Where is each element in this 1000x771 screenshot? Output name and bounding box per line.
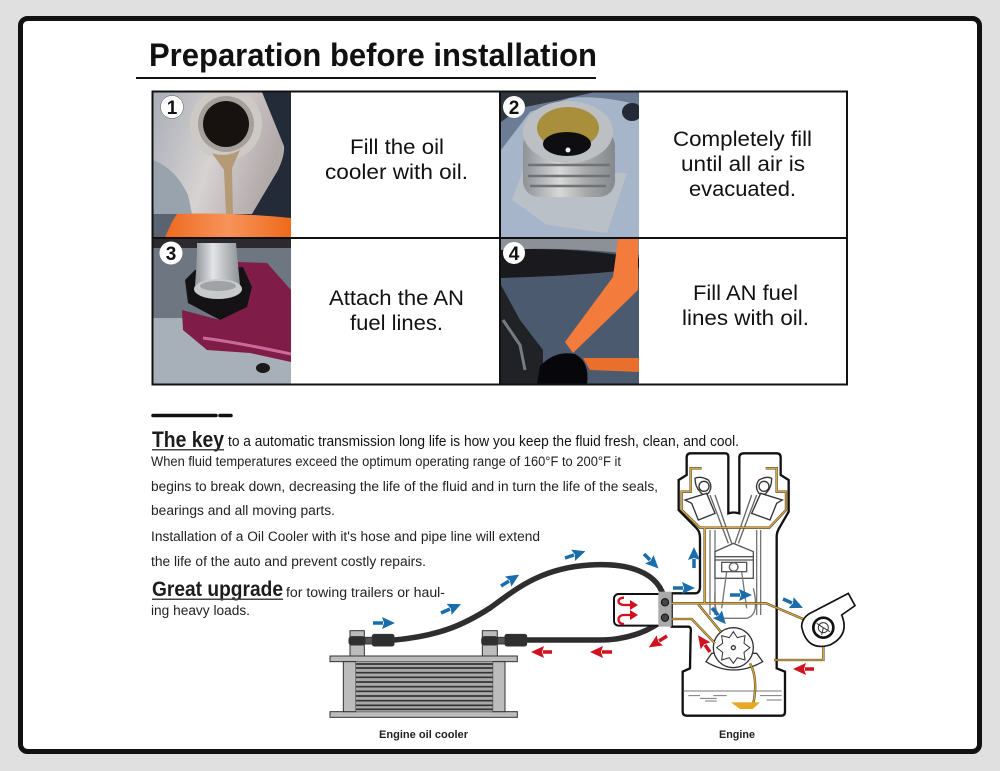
- diagram: oil cooler: [330, 631, 527, 717]
- turbo: [802, 593, 855, 646]
- panel: step 2 photo: [501, 92, 642, 237]
- panel: step 4 photo: [501, 239, 639, 384]
- number badge 4: [503, 242, 525, 265]
- number badge 1: [160, 96, 184, 119]
- heading: the key: [152, 427, 739, 452]
- number badge 1: 1: [167, 98, 178, 119]
- step 1 text: Fill the oil: [350, 136, 444, 159]
- piston and internals: [683, 530, 782, 701]
- flow arrows: red: [543, 636, 814, 669]
- body text: the life of the auto and prevent costly repairs.: [151, 554, 426, 569]
- heading: the key: The key: [152, 427, 225, 452]
- diagram: hoses: [394, 565, 665, 640]
- step 4 text: [682, 282, 809, 330]
- diagram: engine: [614, 453, 855, 716]
- step 4 text: lines with oil.: [682, 307, 809, 330]
- step 4 text: Fill AN fuel: [693, 282, 798, 305]
- panel: step 3 photo: [153, 239, 291, 384]
- step 2 text: evacuated.: [689, 178, 796, 201]
- heading: great upgrade: ing heavy loads.: [151, 603, 250, 618]
- label: engine oil cooler: Engine oil cooler: [379, 729, 469, 741]
- step 2 text: until all air is: [681, 153, 805, 176]
- number badge 3: 3: [166, 244, 176, 265]
- step 1 text: [325, 136, 468, 184]
- panel: steps table grid: [152, 91, 847, 385]
- step 3 text: [329, 287, 464, 335]
- step 2 text: Completely fill: [673, 128, 812, 151]
- title: Preparation before installation: [149, 37, 597, 73]
- step 2 text: [673, 128, 812, 201]
- label: engine: Engine: [719, 729, 755, 741]
- oil passages: [672, 468, 823, 703]
- oil filter: [614, 592, 672, 627]
- heading: great upgrade: [151, 578, 445, 618]
- number badge 3: [160, 242, 182, 265]
- step 3 text: Attach the AN: [329, 287, 464, 310]
- flow arrows: blue: [373, 554, 792, 623]
- body text: bearings and all moving parts.: [151, 503, 335, 518]
- camshafts and valves: [685, 477, 782, 543]
- number badge 2: 2: [509, 98, 519, 119]
- heading: great upgrade: for towing trailers or haul-: [286, 585, 445, 600]
- body text: [151, 454, 658, 569]
- heading: the key: to a automatic transmission long life is how you keep the fluid fresh, clean, and cool.: [228, 434, 739, 450]
- body text: When fluid temperatures exceed the optimum operating range of 160°F to 200°F it: [151, 454, 621, 469]
- panel: step 1 photo: [153, 88, 291, 237]
- body text: begins to break down, decreasing the life of the fluid and in turn the life of the seals,: [151, 479, 658, 494]
- body text: Installation of a Oil Cooler with it's hose and pipe line will extend: [151, 529, 540, 544]
- number badge 4: 4: [509, 244, 520, 265]
- section accent rule: [153, 414, 231, 417]
- heading: great upgrade: Great upgrade: [152, 578, 283, 601]
- step 1 text: cooler with oil.: [325, 161, 468, 184]
- step 3 text: fuel lines.: [350, 312, 443, 335]
- number badge 2: [503, 96, 525, 119]
